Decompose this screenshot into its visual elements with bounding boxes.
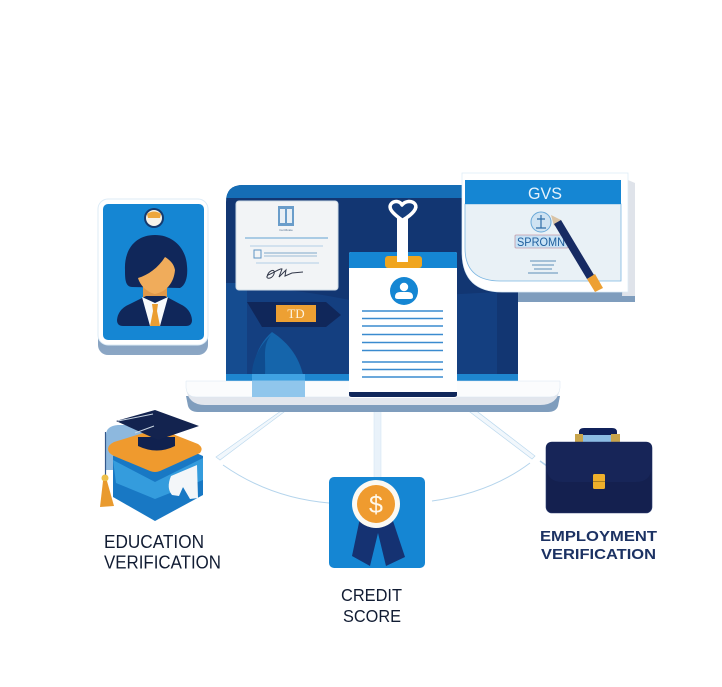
document text lines: [362, 311, 443, 377]
document with lanyard: [349, 201, 457, 398]
graduation cap icon: [100, 410, 203, 521]
label: education verification: VERIFICATION: [104, 552, 221, 572]
GVS title: GVS: [528, 184, 562, 203]
label: employment verification: EMPLOYMENT: [540, 528, 657, 545]
credit score ribbon icon: [329, 477, 425, 568]
stamp word: SPROMN: [517, 237, 565, 249]
laptop screen certificate: Certificate: [279, 228, 293, 232]
screen arrow tag: [247, 302, 341, 327]
profile icon: [390, 277, 418, 305]
credit score ribbon icon: $: [369, 491, 383, 519]
pen: [551, 215, 603, 292]
GVS certificate with pen: [462, 173, 635, 302]
badge person: [117, 235, 192, 326]
briefcase icon: [546, 428, 652, 513]
label: credit score: SCORE: [343, 606, 401, 626]
lanyard heart clip: [390, 201, 416, 262]
screen arrow tag: TD: [287, 306, 305, 321]
screen blue leaf: [252, 332, 305, 397]
label: education verification: [104, 532, 221, 572]
badge small seal: [144, 208, 164, 228]
connector lines: [216, 406, 547, 503]
label: credit score: [341, 585, 402, 626]
laptop screen certificate: [236, 201, 338, 290]
label: employment verification: VERIFICATION: [541, 546, 656, 563]
label: credit score: CREDIT: [341, 585, 402, 605]
laptop base: [186, 381, 560, 412]
ID badge card: [98, 199, 208, 355]
label: education verification: EDUCATION: [104, 532, 204, 552]
label: employment verification: [540, 528, 657, 563]
laptop: [226, 185, 518, 397]
